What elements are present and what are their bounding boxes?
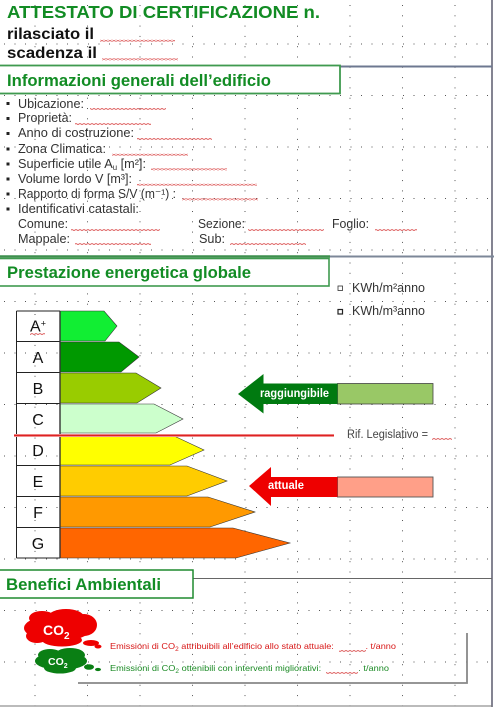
emissions text: improvements: 2 — [175, 669, 180, 675]
icon: red CO2 cloud — [24, 609, 102, 648]
heading: benefici ambientali — [0, 570, 193, 598]
building information list: u — [113, 163, 117, 172]
icon: green CO2 cloud: CO — [48, 656, 64, 668]
class letters table: C — [32, 412, 44, 429]
emissions bracket — [78, 633, 467, 683]
title block — [7, 2, 320, 62]
emissions text: improvements: ottenibili con interventi migliorativi: — [179, 663, 324, 673]
building information list: Sezione: — [198, 216, 245, 231]
building information list: [m²]: — [117, 156, 146, 171]
emissions text: improvements: . t/anno — [358, 663, 389, 673]
building information list: Proprietà: — [18, 110, 72, 125]
class letters table: A — [30, 318, 41, 336]
heading: benefici ambientali: Benefici Ambientali — [6, 575, 161, 594]
title block: rilasciato il — [7, 26, 94, 43]
building information list: Comune: — [18, 216, 68, 231]
energy class scale — [16, 311, 290, 558]
building information list: Foglio: — [332, 216, 369, 231]
building information list: Ubicazione: — [18, 96, 84, 111]
building information list: Rapporto di forma S/V (m⁻¹) : — [18, 186, 176, 201]
class letters table: G — [32, 536, 44, 553]
heading: informazioni generali: Informazioni generali dell’edificio — [7, 71, 271, 90]
units options — [338, 281, 425, 318]
legislative reference line — [14, 429, 452, 441]
arrow: raggiungibile — [238, 374, 433, 414]
class letters table — [16, 311, 60, 558]
icon: green CO2 cloud: 2 — [64, 663, 68, 670]
class letters table: D — [32, 443, 44, 460]
heading: informazioni generali — [0, 66, 340, 94]
building information list: Superficie utile A — [18, 156, 115, 171]
heading: prestazione energetica — [0, 258, 329, 286]
arrow: attuale — [249, 467, 433, 506]
icon: red CO2 cloud: CO — [43, 622, 64, 638]
arrow: raggiungibile: raggiungibile — [260, 388, 329, 400]
class letters table: E — [33, 474, 43, 491]
emissions text: current state: Emissioni di CO — [110, 641, 170, 651]
emissions text: current state — [110, 641, 396, 653]
class bars — [60, 311, 290, 558]
heading: prestazione energetica: Prestazione energetica globale — [7, 263, 251, 282]
arrow: attuale: attuale — [268, 480, 304, 492]
class letters table: + — [41, 318, 46, 328]
icon: red CO2 cloud: 2 — [64, 631, 70, 642]
bullets — [6, 102, 10, 210]
legislative reference line: Rif. Legislativo = — [347, 429, 428, 441]
building information list: Zona Climatica: — [18, 141, 106, 156]
emissions text: current state: attribuibili all’edificio allo stato attuale: — [179, 641, 336, 651]
emissions text: improvements: Emissioni di CO — [110, 663, 170, 673]
building information list: Volume lordo V [m³]: — [18, 171, 132, 186]
units options: KWh/m³anno — [352, 304, 425, 318]
building information list: Anno di costruzione: — [18, 125, 134, 140]
title block: scadenza il — [7, 45, 97, 62]
emissions text: current state: . t/anno — [365, 641, 396, 651]
units options: KWh/m²anno — [352, 281, 425, 295]
icon: green CO2 cloud — [35, 648, 101, 674]
building information list: Mappale: — [18, 231, 70, 246]
title block: ATTESTATO DI CERTIFICAZIONE n. — [7, 2, 320, 22]
emissions text: improvements — [110, 663, 389, 675]
building information list — [6, 96, 417, 246]
class letters table: F — [33, 505, 43, 522]
building information list: Identificativi catastali: — [18, 201, 139, 216]
emissions text: current state: 2 — [175, 647, 179, 653]
building information list: Sub: — [199, 231, 225, 246]
class letters table: B — [33, 381, 43, 398]
class letters table: A — [33, 350, 44, 367]
